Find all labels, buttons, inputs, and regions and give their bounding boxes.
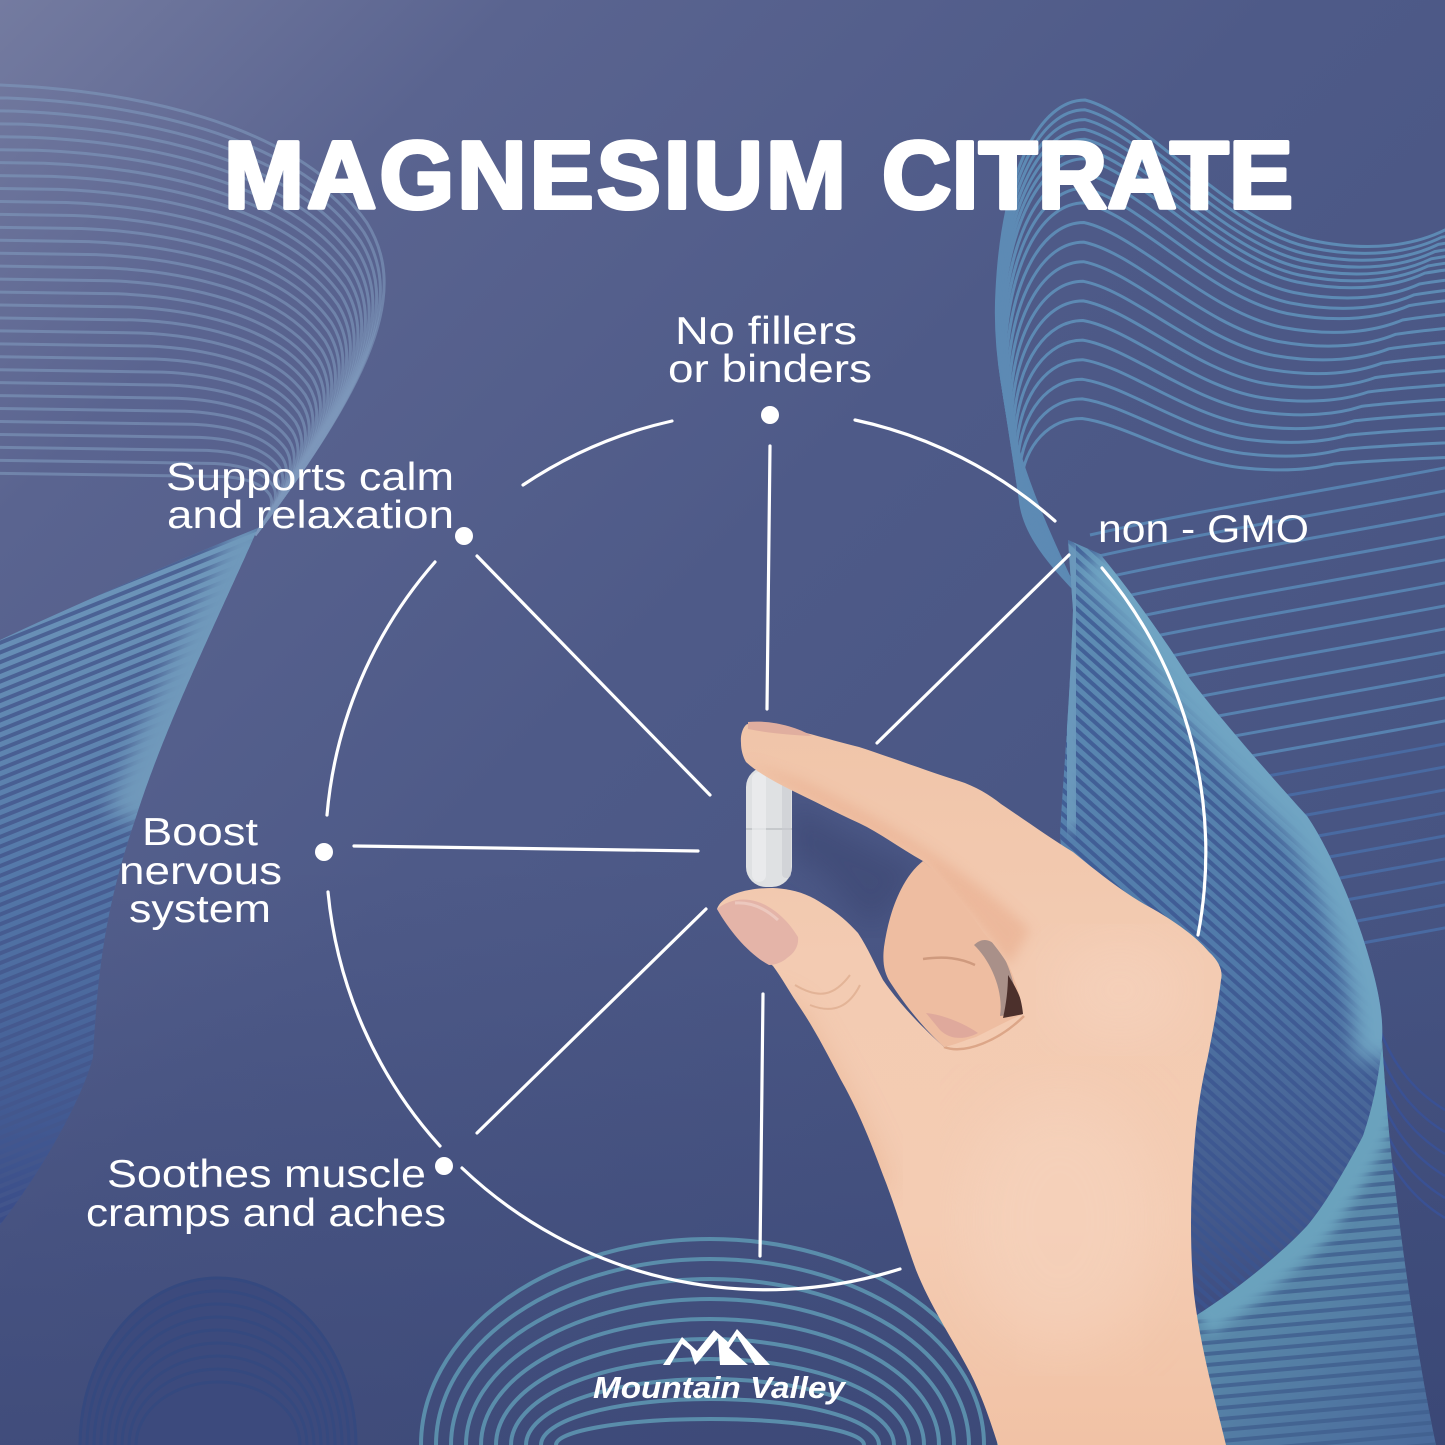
knuckle highlight xyxy=(1050,935,1190,1045)
thumb web crease xyxy=(944,1016,1024,1049)
thumbnail highlight xyxy=(735,903,778,920)
wrist highlight xyxy=(1018,1255,1104,1320)
wave band: right main xyxy=(1050,530,1390,1320)
wave band: bottom right xyxy=(1190,1030,1440,1445)
label: soothes muscle cramps and aches xyxy=(86,1153,446,1235)
title: MAGNESIUM xyxy=(224,122,846,229)
logo wordmark: Mountain Valley xyxy=(593,1370,847,1405)
hand xyxy=(700,700,1240,1445)
capsule xyxy=(746,767,792,887)
wave lines: far right dark curves xyxy=(1380,1030,1445,1218)
label: boost nervous system: Boost xyxy=(142,811,258,854)
middle finger crease xyxy=(923,958,975,965)
label: no fillers or binders xyxy=(668,310,872,391)
spoke: top right xyxy=(877,555,1069,743)
wave lines: top left xyxy=(0,60,384,535)
spoke: top left xyxy=(477,556,710,795)
finger shadow hollow xyxy=(974,940,1024,1016)
title: CITRATE xyxy=(882,122,1293,229)
wave lines: right middle xyxy=(1090,465,1445,788)
thumb shading xyxy=(800,1006,888,1182)
rim arc: top right xyxy=(855,420,1055,521)
label: boost nervous system: system xyxy=(129,888,271,931)
rim arc: top left xyxy=(523,421,672,485)
label: supports calm and relaxation: Supports calm xyxy=(166,456,454,499)
thumb joint creases xyxy=(795,975,860,1009)
spoke: bottom left xyxy=(477,909,706,1133)
wave band: left ridge xyxy=(0,520,270,1230)
rim arc: bottom xyxy=(462,1168,900,1290)
curled middle finger xyxy=(883,861,1023,1062)
wave rings: bottom center xyxy=(421,1239,999,1445)
dot markers xyxy=(315,406,779,1175)
hand body xyxy=(700,700,1240,1445)
label: supports calm and relaxation xyxy=(166,456,454,537)
wave lines: right lower xyxy=(1090,741,1445,995)
spoke: left xyxy=(354,846,698,851)
label: soothes muscle cramps and aches: Soothes muscle xyxy=(107,1153,426,1196)
curled finger nail xyxy=(926,1013,978,1038)
index fingernail xyxy=(748,722,812,736)
rim arc: left upper xyxy=(327,562,435,815)
index finger shading xyxy=(776,775,1030,962)
label: non-GMO: non - GMO xyxy=(1098,508,1309,551)
label: boost nervous system xyxy=(119,811,282,931)
label: no fillers or binders: or binders xyxy=(668,348,872,391)
spoke: top xyxy=(767,446,770,709)
wheel diagram xyxy=(327,420,1206,1290)
label: supports calm and relaxation: and relaxation xyxy=(167,494,454,537)
spoke: bottom xyxy=(760,994,763,1256)
title xyxy=(224,122,1293,229)
wave rings: bottom left xyxy=(80,1278,356,1445)
logo: mountain valley xyxy=(593,1329,847,1405)
rim arc: right xyxy=(1102,568,1206,935)
dark gap xyxy=(1003,975,1024,1018)
label: soothes muscle cramps and aches: cramps and aches xyxy=(86,1192,446,1235)
label: no fillers or binders: No fillers xyxy=(675,310,857,353)
shadow under fingers xyxy=(790,800,925,925)
thumbnail xyxy=(717,899,798,965)
rim arc: left lower xyxy=(328,892,440,1146)
label: boost nervous system: nervous xyxy=(119,850,282,893)
logo mountains xyxy=(663,1329,770,1365)
wave lines: right upper xyxy=(996,100,1445,590)
